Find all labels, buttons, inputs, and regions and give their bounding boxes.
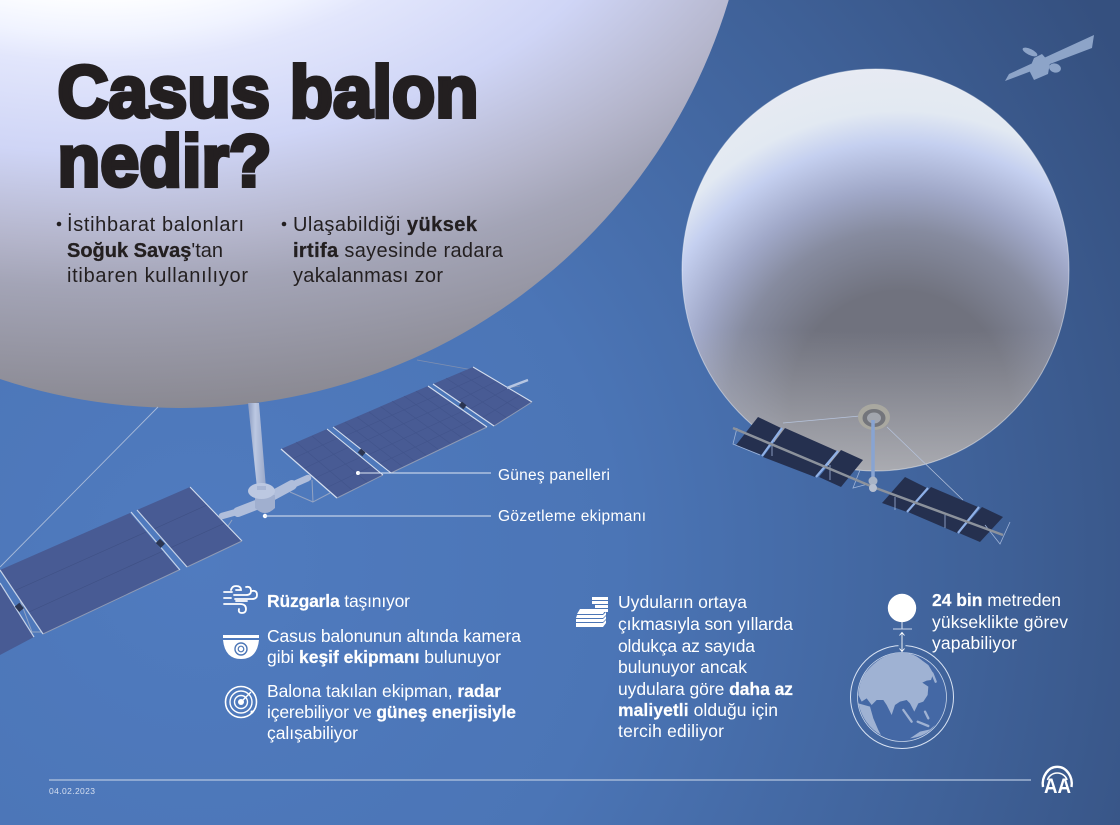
satellite icon	[1005, 35, 1094, 81]
text: radar: çalışabiliyor	[267, 723, 358, 743]
text: camera: Casus balonunun altında kamera	[267, 626, 521, 646]
text: radar: içerebiliyor ve güneş enerjisiyle	[267, 702, 516, 722]
icon: wind	[224, 586, 257, 613]
small balloon rigging	[733, 404, 1010, 544]
date: 04.02.2023	[49, 786, 95, 796]
text: wind: Rüzgarla taşınıyor	[267, 591, 410, 611]
pole	[248, 403, 266, 488]
solar panel E	[0, 513, 179, 634]
solar panel F	[0, 583, 34, 655]
intro bullet: history: İstihbarat balonları	[67, 213, 244, 236]
icon: money stacks	[576, 597, 608, 627]
equipment arms	[222, 478, 308, 516]
title	[58, 52, 478, 202]
text: altitude: yapabiliyor	[932, 633, 1017, 653]
intro bullet: altitude: yakalanması zor	[293, 265, 443, 287]
balloon mount	[858, 404, 890, 430]
logo: AA	[1043, 767, 1072, 798]
globe	[850, 643, 954, 748]
mast wire	[417, 360, 520, 388]
balloon symbol	[888, 594, 916, 629]
icon: radar	[226, 686, 256, 718]
small panels	[736, 417, 1003, 542]
icon: dome camera	[223, 635, 259, 659]
callout: surveillance equipment	[263, 508, 646, 525]
solar panel C	[433, 367, 532, 426]
strut wires	[20, 480, 330, 632]
support wire	[0, 407, 158, 567]
text: altitude	[932, 590, 1068, 653]
text: altitude: yükseklikte görev	[932, 612, 1068, 632]
intro bullet: history: itibaren kullanılıyor	[67, 265, 248, 287]
intro bullet: history	[57, 213, 248, 287]
panel frame struts	[327, 384, 494, 475]
logo: AA: AA	[1044, 775, 1071, 798]
title: Casus balon	[58, 52, 478, 133]
mast tip	[507, 380, 528, 388]
balloon pole	[871, 420, 875, 482]
altitude arrow	[900, 632, 904, 652]
text: cost: oldukça az sayıda	[618, 636, 755, 656]
text: cost: tercih ediliyor	[618, 721, 724, 741]
panel hinges	[15, 402, 467, 612]
small balloon	[682, 69, 1069, 471]
large balloon	[0, 0, 753, 408]
text: cost	[618, 592, 793, 741]
intro bullet: history: Soğuk Savaş'tan	[67, 240, 223, 262]
text: cost: bulunuyor ancak	[618, 657, 747, 677]
solar panel D	[137, 487, 242, 567]
panel struts	[762, 428, 979, 533]
large solar array	[0, 360, 532, 655]
solar panel A	[281, 429, 383, 498]
callout: surveillance equipment: Gözetleme ekipmanı	[498, 508, 646, 525]
callout: solar panels	[356, 467, 610, 484]
hub	[868, 476, 878, 492]
truss lines	[733, 428, 1010, 544]
title: nedir?	[58, 121, 272, 202]
solar panel B	[333, 386, 487, 473]
text: altitude: 24 bin metreden	[932, 590, 1061, 610]
balloon wires	[783, 416, 963, 500]
text: cost: çıkmasıyla son yıllarda	[618, 614, 793, 634]
text: cost: uydulara göre daha az	[618, 679, 793, 699]
text: camera	[267, 626, 521, 667]
text: radar	[267, 681, 516, 743]
intro bullet: altitude: Ulaşabildiği yüksek	[293, 214, 478, 236]
array beam	[733, 428, 1003, 535]
footer rule	[49, 779, 1031, 781]
equipment hub	[248, 483, 275, 513]
text: radar: Balona takılan ekipman, radar	[267, 681, 501, 701]
text: cost: Uyduların ortaya	[618, 592, 747, 612]
text: camera: gibi keşif ekipmanı bulunuyor	[267, 647, 501, 667]
text: cost: maliyetli olduğu için	[618, 700, 778, 720]
icon: balloon over globe	[850, 594, 954, 748]
intro bullet: altitude	[282, 214, 504, 287]
intro bullet: altitude: irtifa sayesinde radara	[293, 240, 504, 262]
callout: solar panels: Güneş panelleri	[498, 467, 610, 484]
left frame struts	[0, 510, 187, 637]
